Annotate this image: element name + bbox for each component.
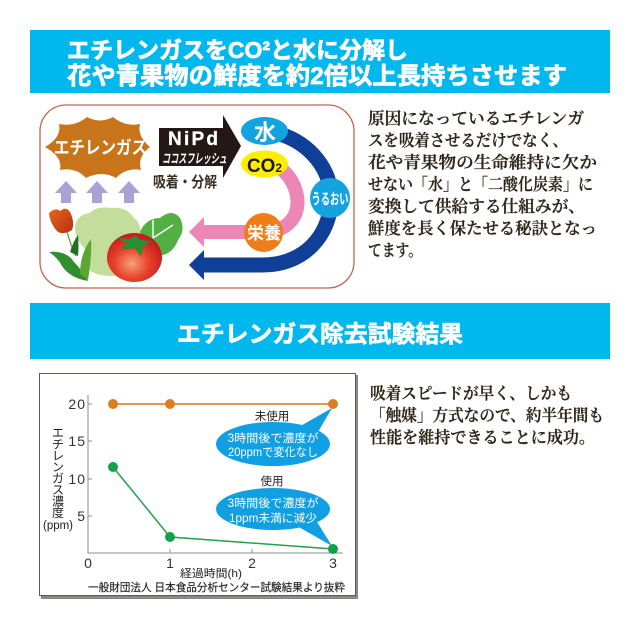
label: used: 使用 bbox=[260, 474, 284, 488]
badge: CO2: CO2 bbox=[247, 156, 282, 177]
x axis tick labels: 2 bbox=[248, 555, 256, 571]
y axis tick labels: 5 bbox=[77, 508, 86, 524]
panel: line chart bbox=[40, 374, 358, 599]
callout: used result: 1ppm未満に減少 bbox=[229, 511, 317, 525]
text block: explanation: てます。 bbox=[368, 241, 422, 260]
badge: moisture: うるおい bbox=[312, 191, 348, 208]
callout: unused result: 20ppmで変化なし bbox=[228, 446, 318, 459]
x axis tick labels: 3 bbox=[329, 555, 337, 571]
icon: flowers and vegetables bbox=[49, 208, 183, 282]
x axis title: 経過時間(h) bbox=[180, 567, 242, 580]
callout: used result: 3時間後で濃度が bbox=[228, 496, 319, 510]
x axis tick labels bbox=[84, 555, 337, 571]
label: unused: 未使用 bbox=[255, 409, 289, 423]
badge: water: 水 bbox=[254, 120, 276, 145]
section heading band bbox=[30, 303, 610, 359]
y axis title: ン bbox=[52, 460, 64, 474]
icon: tulip bbox=[49, 209, 91, 281]
text block: test summary: 性能を維持できることに成功。 bbox=[370, 428, 595, 447]
badge: moisture bbox=[310, 178, 350, 218]
burst: ethylene gas: エチレンガス bbox=[54, 138, 147, 158]
text block: explanation: 鮮度を長く保たせる秘訣となっ bbox=[368, 219, 597, 238]
icon: lettuce bbox=[75, 208, 140, 276]
text block: test summary: 「触媒」方式なので、約半年間も bbox=[370, 405, 604, 425]
section heading band: エチレンガス除去試験結果 bbox=[177, 321, 463, 347]
badge: nutrients: 栄養 bbox=[247, 223, 281, 243]
header band bbox=[30, 30, 610, 93]
text block: explanation bbox=[368, 109, 597, 260]
y axis title: 度 bbox=[52, 506, 64, 520]
badge: CO2 bbox=[241, 150, 288, 178]
badge: water bbox=[241, 117, 288, 145]
burst: ethylene gas bbox=[45, 117, 150, 178]
chart axes bbox=[88, 395, 343, 553]
x axis tick labels: 0 bbox=[84, 555, 92, 571]
text block: explanation: 花や青果物の生命維持に欠か bbox=[368, 153, 597, 172]
badge: nutrients bbox=[244, 213, 283, 252]
y axis tick labels bbox=[68, 396, 86, 524]
y axis title: レ bbox=[52, 449, 64, 463]
y axis title: ガ bbox=[52, 472, 64, 486]
y axis tick labels: 10 bbox=[68, 471, 86, 487]
x axis tick labels: 1 bbox=[166, 555, 174, 571]
callout: used result bbox=[216, 488, 332, 546]
y axis tick labels: 15 bbox=[68, 433, 86, 449]
icon: green leaf bbox=[140, 213, 183, 260]
arrow: NiPd catalyst: ココスフレッシュ bbox=[162, 151, 227, 166]
y axis title bbox=[43, 426, 73, 532]
header title line 2: 花や青果物の鮮度を約2倍以上長持ちさせます bbox=[67, 63, 567, 90]
y axis tick labels: 20 bbox=[68, 396, 86, 412]
arrow: blue moisture curve bbox=[189, 134, 331, 280]
y axis title: (ppm) bbox=[43, 520, 73, 532]
callout: unused result bbox=[216, 408, 332, 466]
series: unused (orange) bbox=[108, 399, 338, 409]
callout: unused result: 3時間後で濃度が bbox=[228, 431, 319, 445]
y axis title: ス bbox=[52, 483, 64, 497]
text block: explanation: 原因になっているエチレンガ bbox=[368, 109, 584, 128]
icon: tomato bbox=[107, 233, 162, 282]
y axis title: 濃 bbox=[52, 494, 64, 508]
text block: explanation: せない「水」と「二酸化炭素」に bbox=[368, 175, 593, 194]
arrow: pink nutrient curve bbox=[189, 168, 298, 247]
arrows: rising gas bbox=[55, 181, 140, 203]
arrow: NiPd catalyst bbox=[159, 115, 241, 178]
source note: 一般財団法人 日本食品分析センター試験結果より抜粋 bbox=[88, 580, 345, 594]
panel: ethylene decomposition diagram bbox=[40, 105, 354, 288]
text block: test summary bbox=[370, 384, 604, 447]
series: used (green) bbox=[108, 462, 338, 554]
text block: explanation: 変換して供給する仕組みが、 bbox=[368, 197, 585, 216]
y axis title: エ bbox=[52, 426, 64, 440]
arrow: NiPd catalyst: NiPd bbox=[168, 129, 218, 150]
text block: explanation: スを吸着させるだけでなく、 bbox=[368, 131, 568, 150]
label: adsorption and decomposition: 吸着・分解 bbox=[153, 173, 217, 191]
text block: test summary: 吸着スピードが早く、しかも bbox=[370, 384, 572, 403]
header title line 1: エチレンガスをCO²と水に分解し bbox=[67, 37, 408, 63]
y axis title: チ bbox=[52, 437, 64, 451]
